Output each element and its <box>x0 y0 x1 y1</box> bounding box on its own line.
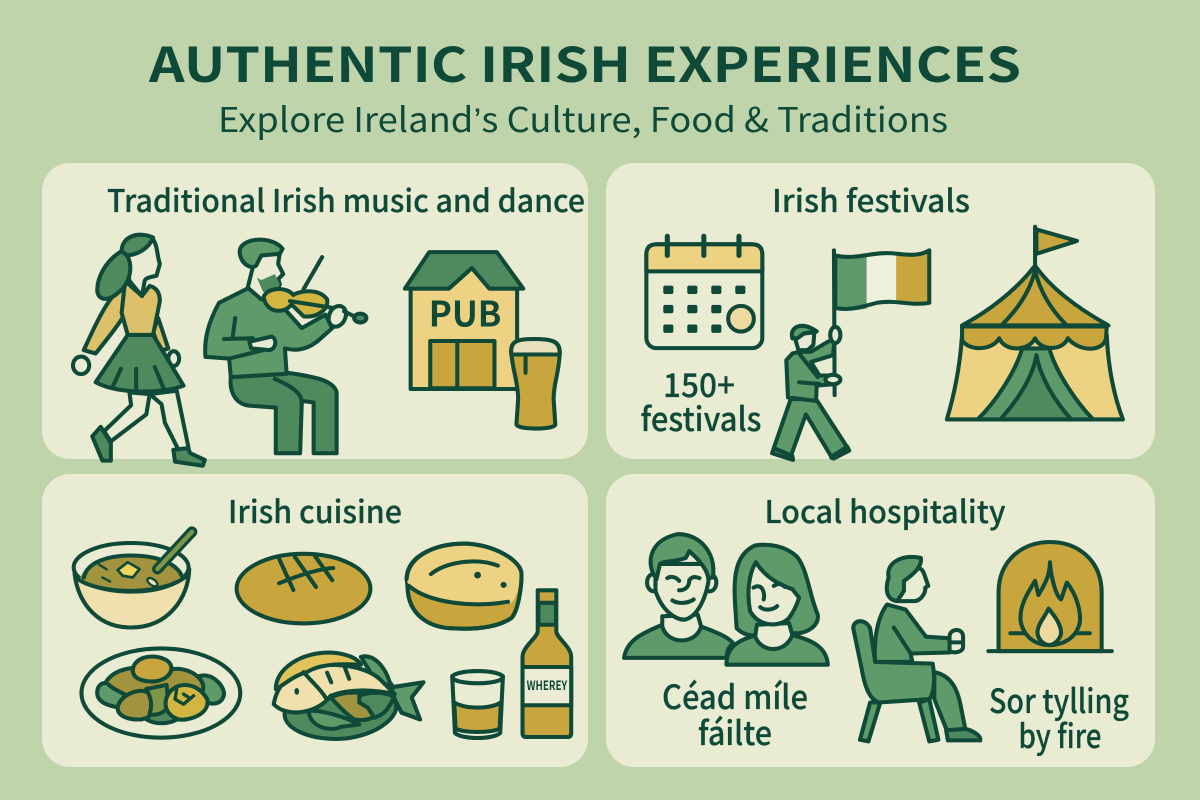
heading: music and dance: Traditional Irish music and dance <box>107 176 585 221</box>
icon: whiskey bottle: WHEREY <box>527 675 568 694</box>
heading: festivals: Irish festivals <box>772 176 970 221</box>
heading: hospitality: Local hospitality <box>764 487 1006 532</box>
panel: Irish cuisine <box>42 474 588 767</box>
icon: stew bowl <box>74 532 192 627</box>
subtitle: Explore Ireland ’s Culture, Food & Traditions <box>218 93 948 142</box>
label: 150+ festivals: 150+ <box>663 359 735 407</box>
label: Sor tylling by fire: Sor tylling <box>989 675 1129 723</box>
panel: Local hospitality <box>606 474 1155 767</box>
icon: person with Irish flag <box>772 250 929 460</box>
label: 150+ festivals: festivals <box>640 393 762 441</box>
icon: smiling man <box>624 534 733 658</box>
icon: dancer <box>73 235 205 466</box>
icon: person seated in armchair <box>853 557 980 741</box>
icon: festival tent <box>947 227 1123 419</box>
label: 150+ festivals <box>640 359 762 441</box>
label: Céad míle fáilte: fáilte <box>698 707 772 755</box>
heading: cuisine: Irish cuisine <box>228 487 402 532</box>
icon: pub building <box>405 252 523 389</box>
icon: fish dish <box>274 652 423 739</box>
panel: Traditional Irish music and dance <box>42 163 588 466</box>
icon: whiskey bottle <box>523 590 571 737</box>
icon: pint glass <box>511 339 560 429</box>
icon: potatoes on plate <box>81 648 240 738</box>
icon: fiddler <box>205 240 366 453</box>
title: AUTHENTIC IRISH EXPERIENCES <box>148 26 1021 96</box>
label: Sor tylling by fire <box>989 675 1129 758</box>
icon: fireplace <box>988 542 1112 651</box>
icon: calendar <box>646 236 762 348</box>
icon: pub building: PUB <box>429 286 501 337</box>
panel: Irish festivals <box>606 163 1155 460</box>
icon: smiling woman <box>726 545 828 665</box>
icon: glass of whiskey <box>452 671 503 738</box>
label: Sor tylling by fire: by fire <box>1018 710 1102 758</box>
icon: pie <box>407 544 522 629</box>
label: Céad míle fáilte: Céad míle <box>662 671 808 719</box>
label: Céad míle fáilte <box>662 671 808 755</box>
icon: soda bread <box>237 554 370 623</box>
